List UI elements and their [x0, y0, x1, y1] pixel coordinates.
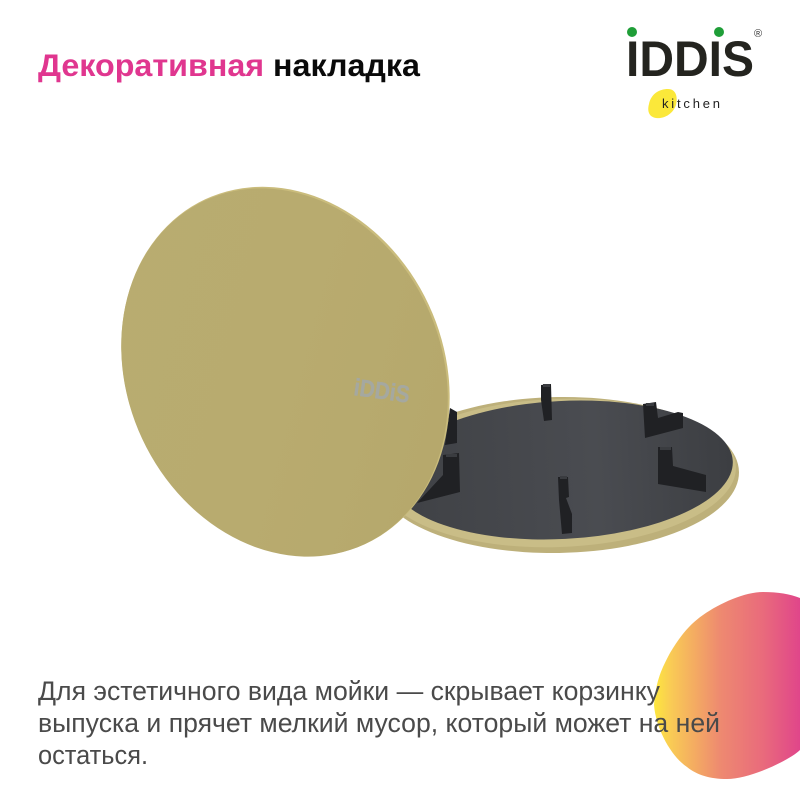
lower disc dark back — [388, 392, 736, 548]
logo wordmark: IDDIS — [626, 31, 754, 87]
title: Декоративная накладка — [38, 47, 420, 83]
lower disc gold rim — [376, 394, 740, 556]
clip: top center — [541, 384, 552, 421]
product: lower disc, back side — [376, 384, 740, 556]
large disc face — [62, 134, 507, 611]
description line 2: выпуска и прячет мелкий мусор, который может на ней — [38, 708, 720, 738]
clip: left front — [417, 453, 460, 503]
mounting clips — [417, 384, 706, 534]
logo yellow spot — [648, 89, 677, 118]
logo registered mark: ® — [754, 28, 762, 40]
description text — [38, 676, 720, 770]
lower disc rim highlight — [378, 393, 738, 553]
logo green dots — [627, 27, 724, 37]
clip top caps — [446, 384, 671, 479]
clip: left rear — [445, 408, 457, 445]
clip: bottom center — [558, 477, 572, 534]
decorative gradient blob — [654, 592, 800, 779]
logo kitchen label: kitchen — [662, 96, 720, 111]
large disc edge — [62, 133, 509, 610]
clip: right — [658, 447, 706, 492]
clip: top right — [643, 402, 683, 438]
logo: IDDIS kitchen — [626, 27, 762, 118]
description line 3: остаться. — [38, 740, 148, 770]
engraved disc logo: iDDiS — [352, 374, 411, 409]
description line 1: Для эстетичного вида мойки — скрывает корзинку — [38, 676, 661, 706]
